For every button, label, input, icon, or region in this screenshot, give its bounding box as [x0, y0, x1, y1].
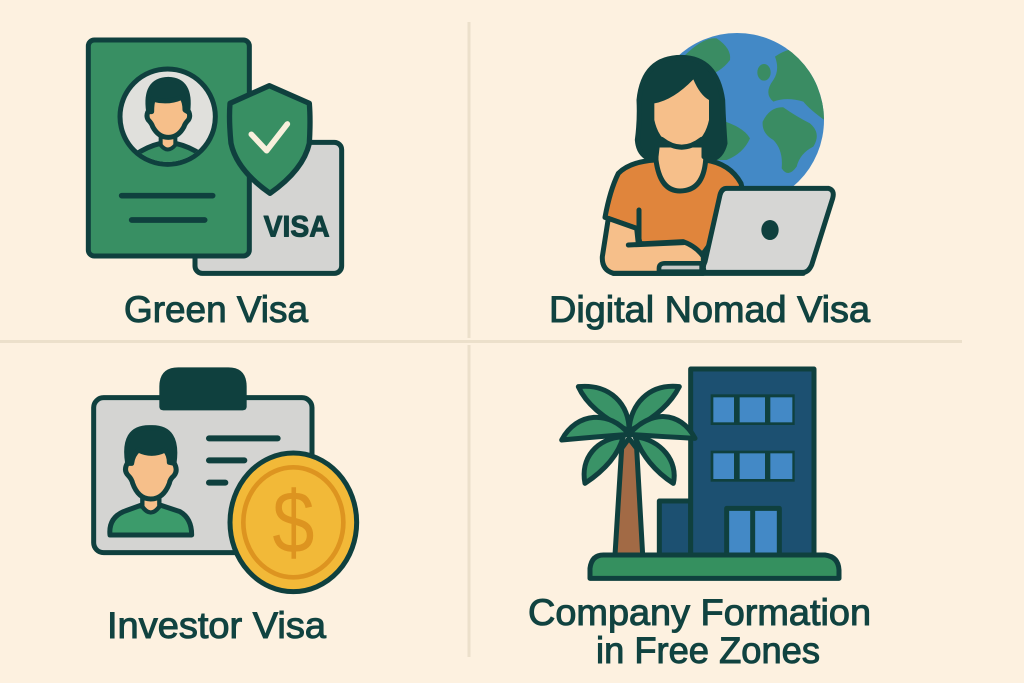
- icon: woman with laptop and globe: [602, 33, 833, 273]
- icon: ID badge with dollar coin: $: [272, 472, 314, 571]
- panel: Digital Nomad Visa: [549, 33, 870, 330]
- label: Green Visa: Green Visa: [124, 289, 308, 330]
- label: Investor Visa: Investor Visa: [107, 605, 326, 646]
- icon: green visa document with shield: [88, 40, 342, 273]
- label: Company Formation in Free Zones: in Free Zones: [596, 630, 820, 671]
- icon: palm tree and office building: [562, 369, 839, 578]
- icon: ID badge with dollar coin: [94, 367, 357, 592]
- icon: green visa document with shield: VISA: [264, 211, 330, 244]
- label: Digital Nomad Visa: Digital Nomad Visa: [549, 289, 870, 330]
- label: Company Formation in Free Zones: [528, 592, 871, 671]
- panel: Investor Visa: [94, 367, 357, 646]
- panel: Green Visa: [88, 40, 342, 330]
- panel: Company Formation in Free Zones: [528, 369, 871, 671]
- label: Company Formation in Free Zones: Company Formation: [528, 592, 871, 633]
